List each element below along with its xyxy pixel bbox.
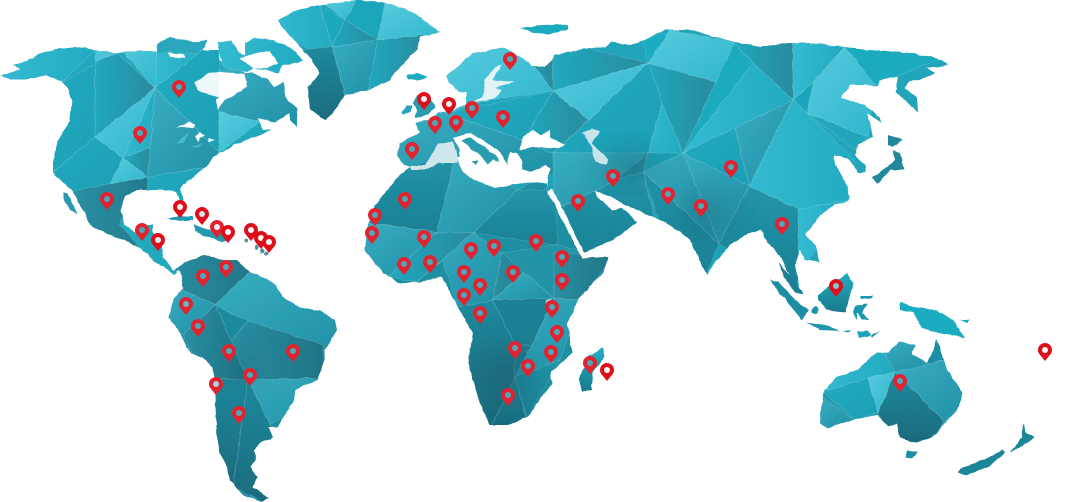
pin: northern Canada: [172, 80, 186, 98]
pin: Ethiopia south: [555, 273, 569, 291]
island: New Guinea: [900, 302, 965, 338]
landmass: North America: [0, 40, 300, 280]
pin: Kenya: [545, 300, 559, 318]
landmass: Eurasia: [395, 25, 955, 305]
pin: Saudi Arabia: [571, 194, 585, 212]
pin: Peru: [191, 319, 205, 337]
pin: Ecuador: [179, 297, 193, 315]
pin: Equatorial Guinea: [457, 288, 471, 306]
landmass: Arctic Archipelago: [157, 37, 303, 73]
pin: Zimbabwe: [521, 359, 535, 377]
pin: Spain: [405, 142, 419, 160]
pins: Asia and Oceania: [571, 160, 1052, 392]
pin: Ivory Coast: [397, 257, 411, 275]
pin: Mexico: [100, 192, 114, 210]
island: Madagascar: [579, 347, 605, 392]
pin: Poland: [465, 101, 479, 119]
pin: Antilles 2: [254, 231, 268, 249]
pin: Myanmar: [775, 217, 789, 235]
pin: Madagascar: [583, 356, 597, 374]
pins: Europe: [405, 52, 517, 160]
pin: Dominican Republic: [210, 220, 224, 238]
island: Iceland: [407, 73, 428, 80]
pin: Mauritius: [600, 363, 614, 381]
pin: Ethiopia north: [555, 250, 569, 268]
pin: Fiji: [1038, 343, 1052, 361]
island: Sakhalin: [888, 135, 903, 147]
pins: South America: [179, 260, 300, 424]
pin: Bolivia north: [222, 344, 236, 362]
pin: Zambia: [508, 341, 522, 359]
pin: Chile north: [209, 377, 223, 395]
island: New Britain: [960, 319, 970, 323]
pin: Argentina: [232, 406, 246, 424]
pin: Mauritania: [368, 208, 382, 226]
pin: Pakistan: [661, 187, 675, 205]
pin: Denmark: [442, 97, 456, 115]
islands: Lesser Antilles: [244, 239, 268, 256]
pin: Antilles 3: [262, 235, 276, 253]
island: Japan: [872, 150, 904, 184]
pin: Puerto Rico: [221, 225, 235, 243]
pin: Finland: [503, 52, 517, 70]
pin: Congo: [473, 306, 487, 324]
pin: western Canada: [133, 126, 147, 144]
pin: Cameroon: [473, 278, 487, 296]
pin: Central African Republic: [506, 265, 520, 283]
pin: Mali: [417, 230, 431, 248]
island: Tasmania: [905, 451, 918, 459]
pin: Nicaragua: [151, 233, 165, 251]
pin: Haiti: [195, 207, 209, 225]
pin: India: [694, 199, 708, 217]
pin: Chad: [487, 239, 501, 257]
landmass: South America: [168, 255, 337, 502]
sea: Red Sea: [548, 188, 586, 258]
pin: Tibet: [724, 160, 738, 178]
island: Cuba: [166, 216, 193, 221]
pin: Guatemala: [135, 223, 149, 241]
pin: UK: [417, 92, 431, 110]
pin: Algeria: [398, 192, 412, 210]
pin: Senegal: [365, 226, 379, 244]
pin: Germany: [449, 115, 463, 133]
pin: Ghana: [423, 255, 437, 273]
pin: Niger: [464, 242, 478, 260]
sea: western Mediterranean: [410, 142, 458, 170]
pin: Australia: [893, 374, 907, 392]
pin: Iran: [606, 169, 620, 187]
island: New Zealand: [958, 423, 1034, 475]
landmass: Baja California: [64, 192, 77, 214]
pin: Brazil: [286, 344, 300, 362]
pin: Sudan: [529, 234, 543, 252]
pin: Mozambique: [544, 345, 558, 363]
landmass: Africa: [364, 160, 608, 426]
sea: Mediterranean: [453, 133, 550, 188]
pin: South Africa: [501, 388, 515, 406]
pin: Borneo: [829, 279, 843, 297]
islands: Indonesia: [770, 262, 881, 338]
pin: Colombia: [196, 269, 210, 287]
pin: Venezuela: [219, 260, 233, 278]
island: Svalbard: [520, 24, 568, 34]
pin: Bolivia south: [243, 368, 257, 386]
pin: France: [428, 116, 442, 134]
pin: Antilles 1: [244, 223, 258, 241]
landmass: Australia: [820, 340, 962, 443]
island: Hispaniola: [193, 224, 230, 242]
pins: North America: [100, 80, 276, 253]
pin: Ukraine: [496, 110, 510, 128]
island: Sicily: [471, 161, 478, 165]
island: Great Britain and Ireland: [402, 95, 435, 118]
landmass: Greenland: [278, 0, 440, 120]
island: Corsica and Sardinia: [455, 147, 459, 157]
pin: Cuba: [173, 200, 187, 218]
pin: Nigeria: [457, 265, 471, 283]
pins: Africa: [365, 192, 614, 406]
landmass: Italy: [462, 137, 499, 164]
pin: Tanzania: [550, 325, 564, 343]
